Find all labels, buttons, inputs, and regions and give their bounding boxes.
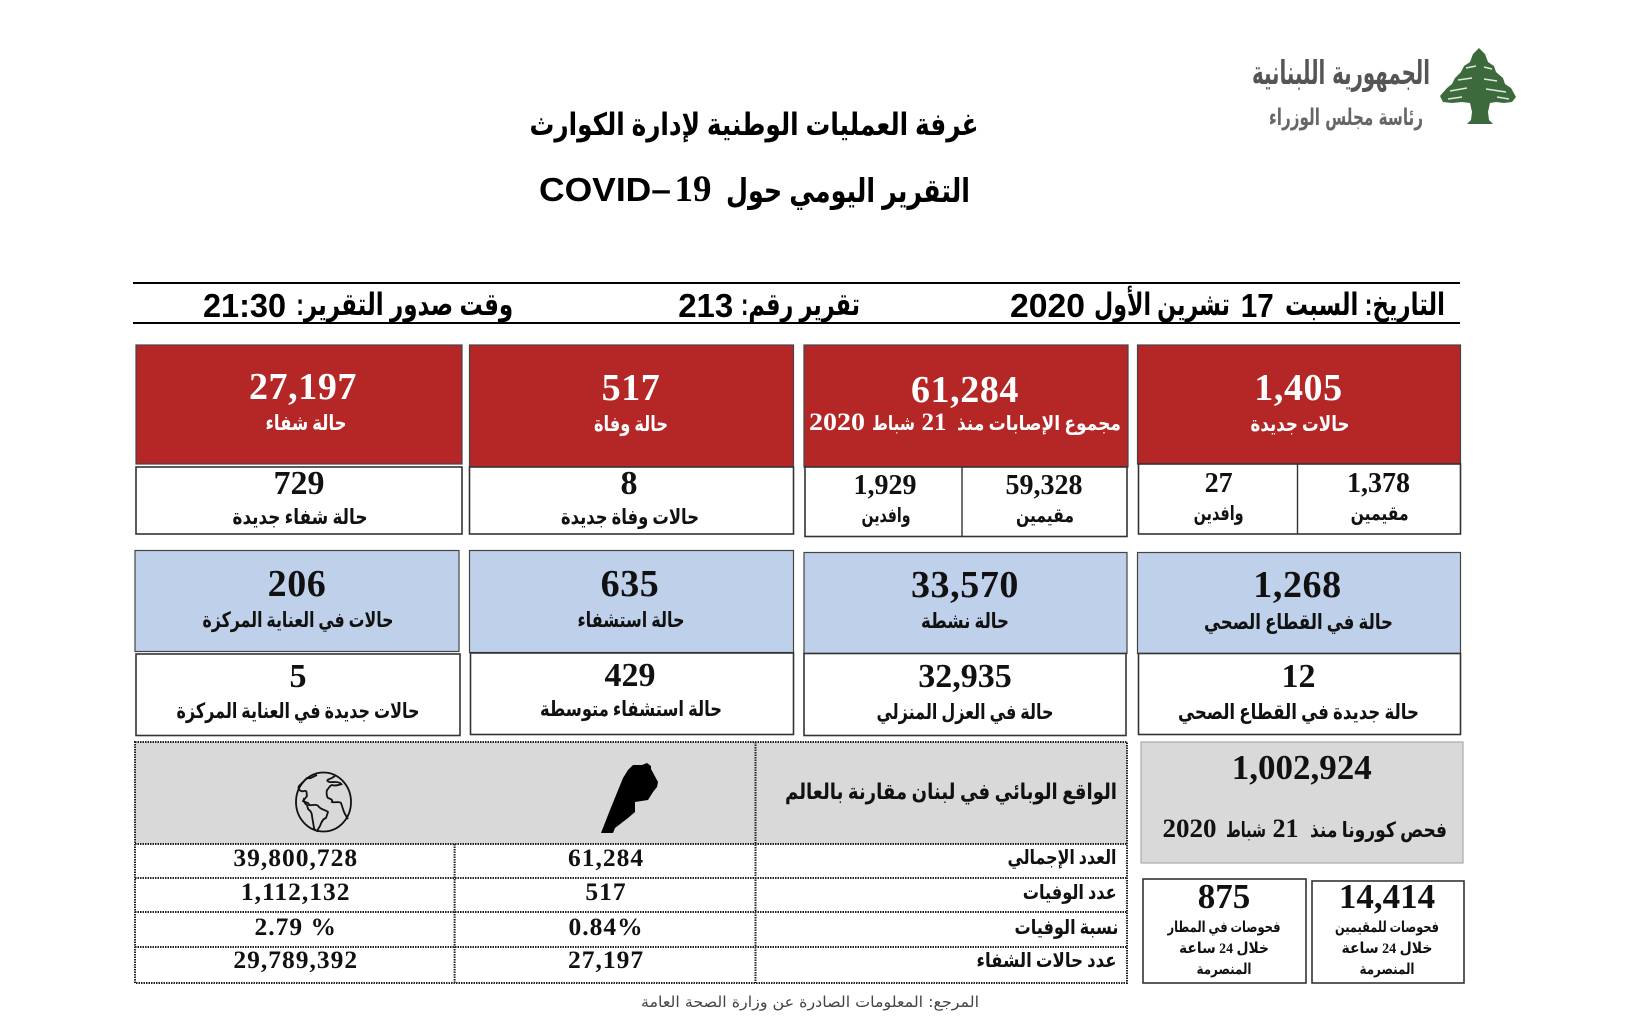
report date: 2020: [1010, 287, 1085, 324]
recoveries label: حالة شفاء: [266, 411, 346, 435]
row: recoveries: [233, 945, 1116, 974]
health sector total: 1,268: [1253, 564, 1342, 606]
infections residents label: مقيمين: [1016, 505, 1074, 527]
hospital label: حالة استشفاء: [578, 608, 684, 632]
infections label: 2020: [809, 409, 865, 436]
report date: [1010, 285, 1445, 324]
panel: new cases: [1138, 345, 1460, 534]
row: total count: [233, 843, 1116, 872]
report information bar: [133, 283, 1460, 324]
row: total count: العدد الإجمالي: [1008, 847, 1116, 870]
new cases arrivals label: وافدين: [1194, 503, 1244, 525]
row: death rate: 2.79 %: [254, 912, 337, 941]
report number: [678, 287, 860, 324]
resident tests label: [1335, 920, 1439, 978]
recoveries total: 27,197: [249, 366, 357, 408]
total tests number: 1,002,924: [1232, 748, 1372, 787]
subtitle: 19: [674, 169, 712, 210]
report time: 21:30: [203, 287, 286, 324]
ICU label: حالات في العناية المركزة: [202, 608, 394, 632]
panel: resident tests: [1312, 877, 1464, 983]
subtitle: [539, 169, 970, 211]
deaths total: 517: [602, 367, 660, 409]
report number: تقرير رقم:: [741, 287, 860, 323]
row: deaths: 517: [585, 877, 627, 906]
panel: total COVID tests: [1141, 742, 1463, 863]
report time: وقت صدور التقرير:: [296, 287, 513, 323]
new deaths number: 8: [620, 465, 638, 502]
new health sector label: حالة جديدة في القطاع الصحي: [1178, 700, 1419, 724]
resident tests label: فحوصات للمقيمين: [1335, 920, 1439, 936]
resident tests number: 14,414: [1339, 877, 1435, 916]
row: death rate: 0.84%: [568, 912, 644, 941]
report date: 17: [1241, 287, 1274, 324]
home isolation label: حالة في العزل المنزلي: [876, 700, 1054, 724]
infections total: 61,284: [911, 369, 1019, 411]
deaths label: حالة وفاة: [594, 412, 668, 436]
row: deaths: 1,112,132: [241, 877, 350, 906]
total tests label: فحص كورونا منذ: [1310, 818, 1447, 842]
row: recoveries: 29,789,392: [233, 945, 358, 974]
moderate hospital label: حالة استشفاء متوسطة: [540, 697, 722, 721]
logo text: Lebanese Republic: الجمهورية اللبنانية: [1252, 53, 1430, 93]
hospital total: 635: [601, 563, 659, 605]
subtitle: التقرير اليومي حول: [726, 172, 970, 211]
row: total count: 39,800,728: [233, 843, 358, 872]
infections label: 21: [922, 409, 946, 436]
new cases arrivals number: 27: [1205, 468, 1233, 499]
home isolation number: 32,935: [918, 658, 1012, 695]
ICU total: 206: [268, 563, 326, 605]
icon: map of Lebanon: [601, 763, 658, 833]
active total: 33,570: [911, 564, 1019, 606]
airport tests label: [1167, 920, 1280, 978]
panel: recoveries: [136, 345, 462, 534]
report number: 213: [678, 287, 733, 324]
new ICU number: 5: [290, 658, 306, 695]
new cases residents label: مقيمين: [1351, 503, 1409, 525]
logo: Lebanese cedar and Presidency of the Council of Ministers: [1252, 48, 1516, 131]
new cases total: 1,405: [1254, 367, 1343, 409]
panel: health sector cases: [1138, 552, 1460, 734]
row: recoveries: عدد حالات الشفاء: [976, 950, 1116, 972]
row: death rate: نسبة الوفيات: [1014, 917, 1118, 939]
row: recoveries: 27,197: [568, 945, 644, 974]
source note: المرجع: المعلومات الصادرة عن وزارة الصحة العامة: [641, 993, 979, 1011]
total tests label: [1162, 814, 1447, 843]
airport tests label: خلال 24 ساعة: [1179, 941, 1269, 957]
report date: التاريخ: السبت: [1285, 287, 1445, 323]
report date: تشرين الأول: [1094, 285, 1230, 323]
panel: ICU cases: [135, 550, 460, 736]
airport tests label: فحوصات في المطار: [1167, 920, 1280, 936]
subtitle: COVID–: [539, 171, 671, 208]
new recoveries number: 729: [274, 465, 324, 502]
new cases residents number: 1,378: [1347, 468, 1410, 499]
row: deaths: [241, 877, 1117, 906]
total tests label: 21: [1272, 814, 1298, 843]
total tests label: شباط: [1226, 818, 1266, 842]
infections arrivals label: وافدين: [862, 505, 910, 527]
logo text: Presidency of the Council of Ministers: رئاسة مجلس الوزراء: [1269, 105, 1423, 131]
resident tests label: المنصرمة: [1360, 962, 1414, 978]
moderate hospital number: 429: [604, 657, 656, 694]
icon: cedar tree: [1440, 48, 1516, 124]
report time: [203, 287, 513, 324]
infections label: مجموع الإصابات منذ: [957, 413, 1121, 435]
panel: comparison table Lebanon vs world: [135, 742, 1127, 983]
row: death rate: [254, 912, 1118, 941]
new health sector number: 12: [1282, 658, 1316, 695]
airport tests number: 875: [1198, 877, 1250, 916]
new recoveries label: حالة شفاء جديدة: [232, 505, 368, 529]
table heading: الواقع الوبائي في لبنان مقارنة بالعالم: [785, 779, 1117, 805]
infections label: [809, 409, 1121, 436]
infections label: شباط: [872, 413, 915, 435]
active label: حالة نشطة: [921, 609, 1009, 633]
panel: hospital cases: [470, 550, 794, 734]
title: غرفة العمليات الوطنية لإدارة الكوارث: [530, 107, 978, 143]
new ICU label: حالات جديدة في العناية المركزة: [176, 699, 420, 723]
new deaths label: حالات وفاة جديدة: [561, 505, 699, 529]
infections arrivals number: 1,929: [854, 470, 916, 501]
panel: airport tests: [1143, 877, 1306, 983]
airport tests label: المنصرمة: [1196, 962, 1252, 978]
panel: deaths: [470, 345, 794, 534]
panel: total infections: [804, 345, 1128, 536]
infections residents number: 59,328: [1006, 470, 1082, 501]
new cases label: حالات جديدة: [1250, 412, 1350, 436]
row: total count: 61,284: [568, 843, 644, 872]
panel: active cases: [804, 552, 1127, 736]
icon: globe: [296, 772, 351, 832]
health sector label: حالة في القطاع الصحي: [1204, 610, 1393, 634]
row: deaths: عدد الوفيات: [1023, 882, 1117, 904]
total tests label: 2020: [1162, 814, 1216, 843]
resident tests label: خلال 24 ساعة: [1342, 941, 1432, 957]
